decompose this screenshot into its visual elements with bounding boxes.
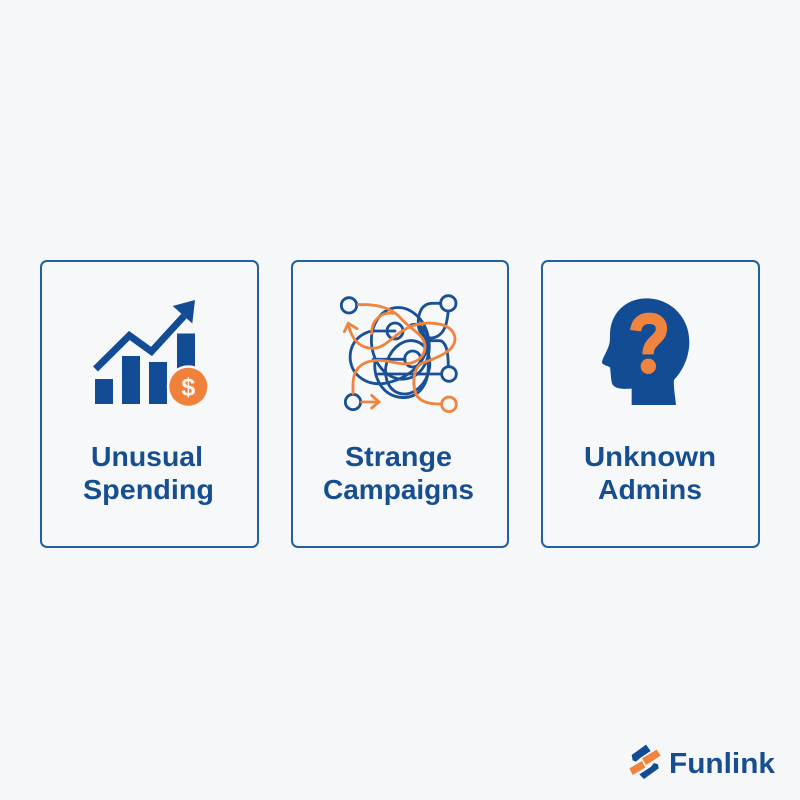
label: unknown admins: Unknown — [584, 441, 716, 472]
icon: rising bar chart with dollar coin: $ — [181, 374, 195, 402]
label: unknown admins — [584, 441, 716, 505]
label: unusual spending — [83, 441, 214, 505]
label: strange campaigns: Strange — [345, 441, 452, 472]
panel: strange campaigns — [292, 261, 508, 547]
panel: unusual spending — [41, 261, 258, 547]
icon: head with question mark — [602, 298, 689, 405]
logo: Funlink — [629, 745, 775, 780]
label: strange campaigns — [323, 441, 474, 505]
icon: tangled network of lines — [341, 296, 456, 412]
panel: unknown admins — [542, 261, 759, 547]
logo: Funlink: Funlink — [669, 748, 775, 780]
icon: rising bar chart with dollar coin — [95, 300, 210, 408]
label: unknown admins: Admins — [598, 474, 702, 505]
icon: Funlink link mark — [629, 745, 661, 779]
label: strange campaigns: Campaigns — [323, 474, 474, 505]
label: unusual spending: Spending — [83, 474, 214, 505]
label: unusual spending: Unusual — [91, 441, 203, 472]
